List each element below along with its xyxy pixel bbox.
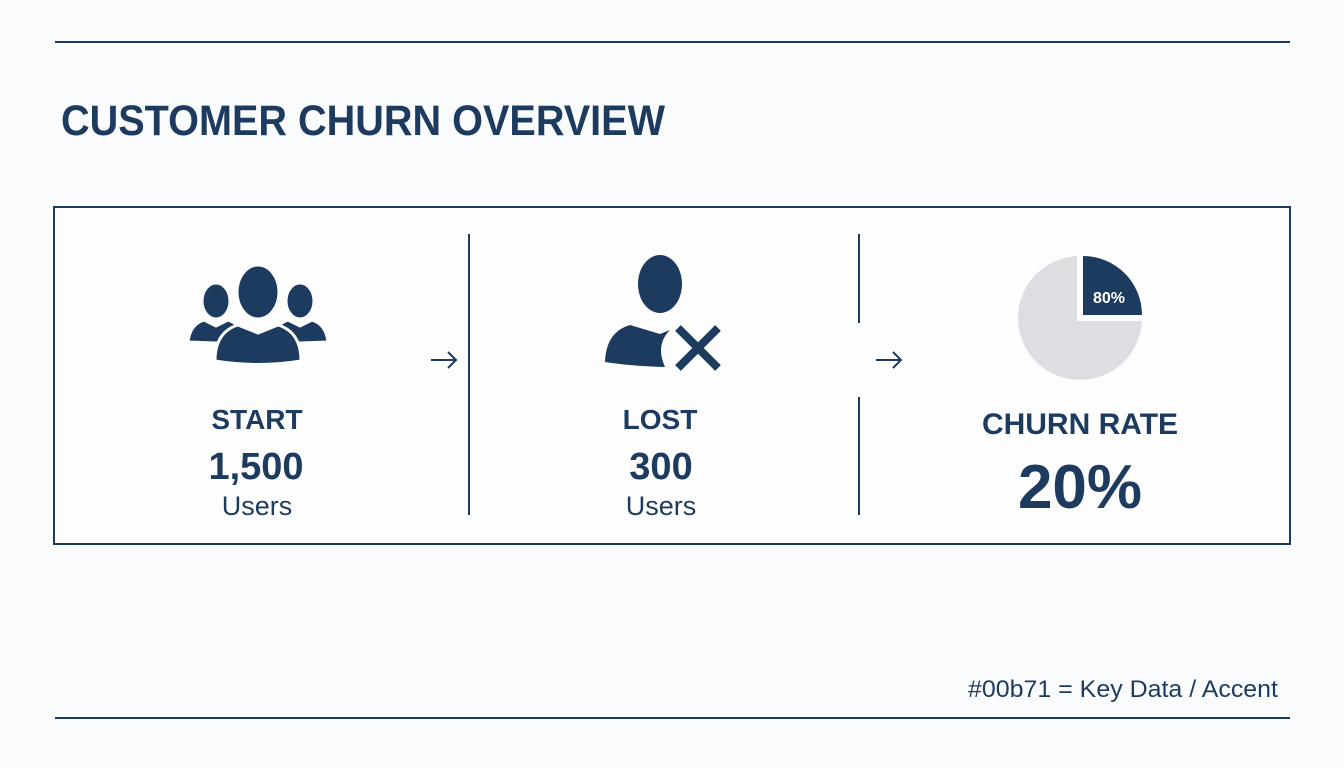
section: start — [188, 265, 328, 521]
arrow 1 — [431, 352, 456, 368]
section: lost — [605, 255, 718, 521]
value: 1,500: 1,500 — [208, 446, 304, 488]
unit: Users: Users — [626, 491, 696, 521]
pie chart — [1018, 253, 1145, 380]
panel: main box — [54, 207, 1290, 544]
label: LOST: LOST — [623, 404, 697, 435]
section: churn rate — [982, 253, 1178, 522]
icon: user with x — [605, 255, 718, 368]
value: 20%: 20% — [1018, 453, 1142, 522]
value: 300: 300 — [629, 446, 693, 488]
label: START: START — [211, 404, 303, 435]
unit: Users: Users — [222, 491, 292, 521]
arrow 2 — [876, 352, 901, 368]
label: CHURN RATE: CHURN RATE — [982, 408, 1178, 441]
title: CUSTOMER CHURN OVERVIEW — [61, 97, 665, 145]
pie chart: 80% — [1093, 290, 1125, 307]
footer note: #00b71 = Key Data / Accent — [968, 676, 1278, 703]
icon: group of users — [188, 265, 328, 364]
